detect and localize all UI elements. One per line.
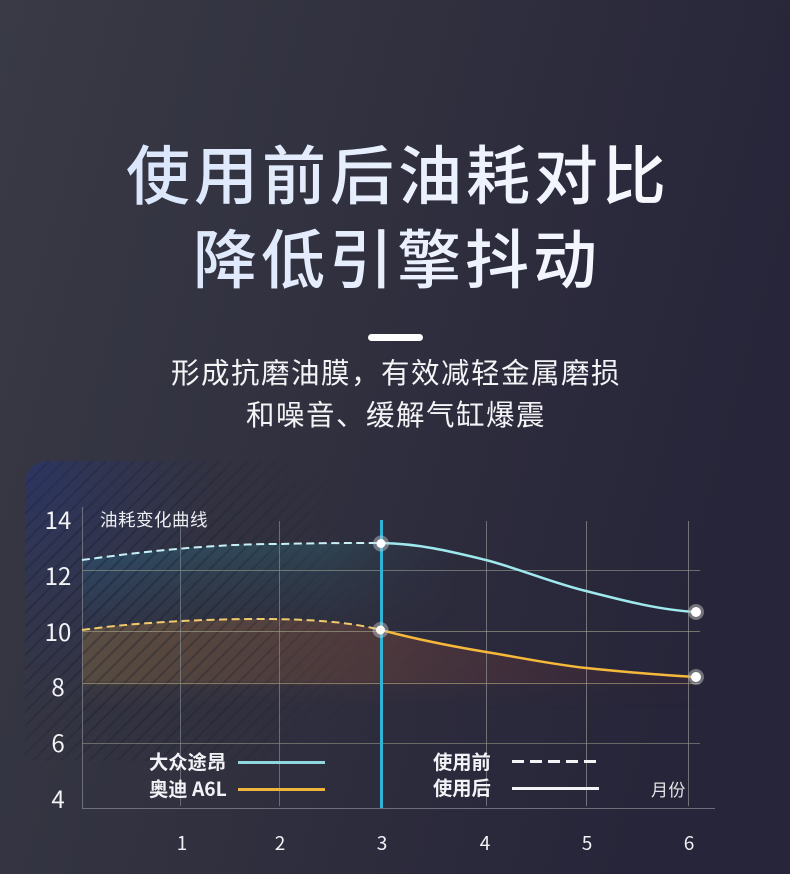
x axis labels: 1 — [177, 829, 187, 856]
x axis labels: 3 — [377, 829, 387, 856]
y axis labels: 8 — [51, 668, 65, 703]
legend: cars — [149, 747, 325, 802]
legend: line styles — [433, 747, 599, 801]
legend item: 奥迪 A6L — [149, 774, 325, 802]
x axis labels — [177, 829, 694, 856]
legend item: 使用前: 使用前 — [433, 747, 491, 775]
curve: 奥迪 A6L before (dashed) — [82, 619, 381, 630]
marker: blue month 6 — [688, 604, 704, 620]
x axis unit: 月份 — [651, 776, 686, 801]
x axis labels: 5 — [582, 829, 592, 856]
chart title: 油耗变化曲线 — [100, 507, 208, 532]
marker: orange month 3 — [372, 622, 388, 638]
title — [126, 126, 670, 302]
grid lines — [82, 507, 715, 808]
y axis labels: 14 — [45, 501, 71, 536]
subtitle — [171, 351, 621, 434]
x axis labels: 2 — [275, 829, 285, 856]
x axis labels: 6 — [684, 829, 694, 856]
legend item: 大众途昂: 大众途昂 — [149, 747, 226, 775]
y axis labels: 12 — [45, 557, 71, 592]
y axis labels: 4 — [51, 780, 65, 815]
area: hatching — [25, 461, 300, 712]
legend item: 使用后 — [433, 773, 599, 801]
title: 使用前后油耗对比 — [126, 126, 670, 218]
area: blue fill — [83, 543, 394, 601]
subtitle: 和噪音、缓解气缸爆震 — [246, 393, 546, 434]
divider bar — [368, 334, 423, 341]
panel: chart backdrop — [25, 461, 320, 761]
curve: 大众途昂 after — [381, 543, 696, 612]
title: 降低引擎抖动 — [193, 210, 601, 302]
marker: orange month 6 — [688, 669, 704, 685]
x axis labels: 4 — [480, 829, 490, 856]
area: orange fill — [82, 619, 688, 686]
subtitle: 形成抗磨油膜，有效减轻金属磨损 — [171, 351, 621, 392]
y axis labels — [45, 501, 71, 815]
legend item: 大众途昂 — [149, 747, 325, 775]
curve: 奥迪 A6L after — [381, 630, 696, 677]
y axis labels: 6 — [51, 724, 65, 759]
marker: blue month 3 — [373, 536, 389, 552]
legend item: 使用后: 使用后 — [433, 773, 491, 801]
chart: area fills — [25, 461, 688, 712]
cyan marker line at month 3 — [380, 520, 383, 808]
curve: 大众途昂 before (dashed) — [82, 543, 381, 560]
legend item: 奥迪 A6L: 奥迪 A6L — [149, 774, 227, 802]
y axis labels: 10 — [45, 613, 71, 648]
